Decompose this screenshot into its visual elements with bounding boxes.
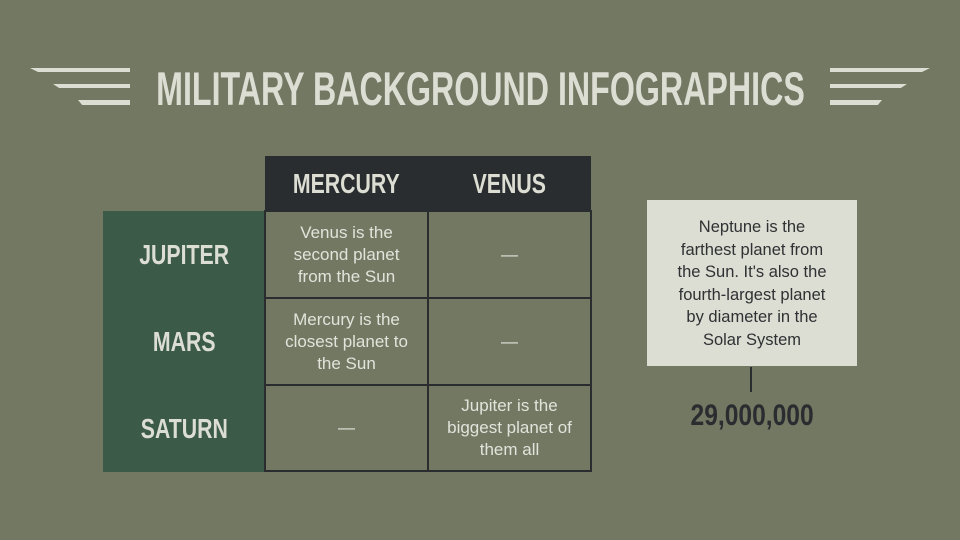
cell <box>427 210 592 299</box>
cell <box>427 297 592 386</box>
row labels column <box>103 211 265 472</box>
table <box>103 156 592 472</box>
decoration: right stripes <box>830 68 930 105</box>
label: mars: MARS <box>153 326 215 356</box>
callout box: by diameter in the <box>686 308 818 326</box>
number: 29,000,000 <box>690 399 814 432</box>
cell: them all <box>480 440 539 459</box>
cell <box>264 297 429 386</box>
cell: — <box>501 244 518 264</box>
cell: Jupiter is the <box>461 396 558 415</box>
cell: Mercury is the <box>293 310 400 328</box>
cell <box>264 384 429 472</box>
callout box: Solar System <box>703 330 801 348</box>
cell: biggest planet of <box>447 418 572 437</box>
cell: Venus is the <box>300 222 393 242</box>
callout box: fourth-largest planet <box>679 286 825 304</box>
header: mercury: MERCURY <box>293 168 400 198</box>
callout box <box>647 200 857 366</box>
cell: the Sun <box>317 354 376 372</box>
callout box: farthest planet from <box>681 240 823 258</box>
label: jupiter: JUPITER <box>139 238 229 270</box>
connector line <box>750 367 752 392</box>
cell: closest planet to <box>285 332 408 350</box>
cell: from the Sun <box>298 266 395 286</box>
header: venus: VENUS <box>473 168 546 198</box>
callout box: Neptune is the <box>699 218 805 236</box>
decoration: left stripes <box>30 68 130 105</box>
cell: second planet <box>294 244 399 264</box>
label: saturn: SATURN <box>140 412 228 444</box>
title: MILITARY BACKGROUND INFOGRAPHICS <box>156 62 804 115</box>
cell: — <box>501 332 518 350</box>
cell: — <box>338 418 355 437</box>
header row <box>265 156 591 211</box>
callout box: the Sun. It's also the <box>678 263 826 281</box>
cell <box>427 384 592 472</box>
cell <box>264 210 429 299</box>
